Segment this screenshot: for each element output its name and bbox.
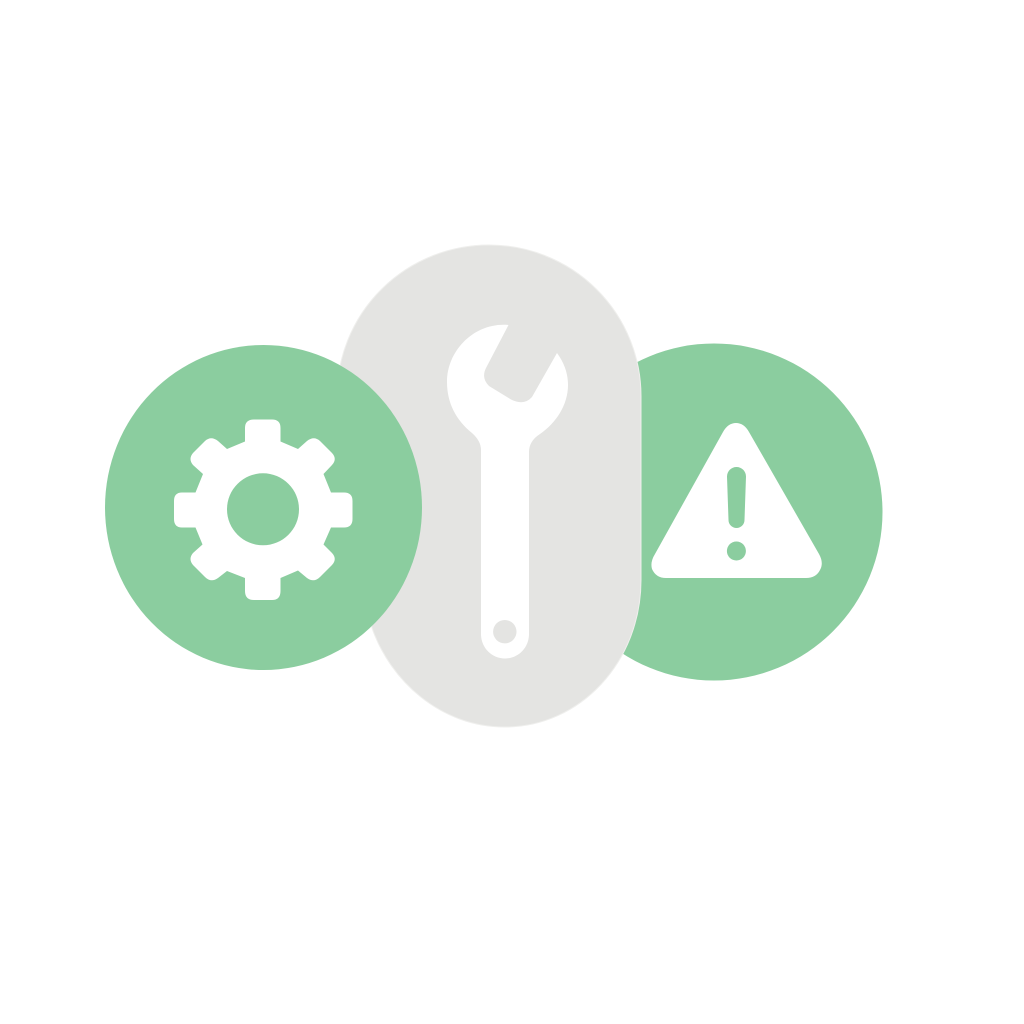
central grey capsule xyxy=(337,245,641,727)
right green circle xyxy=(546,344,882,680)
icon: warning triangle xyxy=(651,423,822,578)
exclamation dot xyxy=(727,542,746,560)
icon: wrench xyxy=(447,325,568,658)
left green circle xyxy=(105,345,422,670)
gear hole xyxy=(227,473,299,545)
exclamation bar xyxy=(727,467,746,528)
wrench hole xyxy=(493,620,516,643)
icon: gear xyxy=(174,420,352,600)
